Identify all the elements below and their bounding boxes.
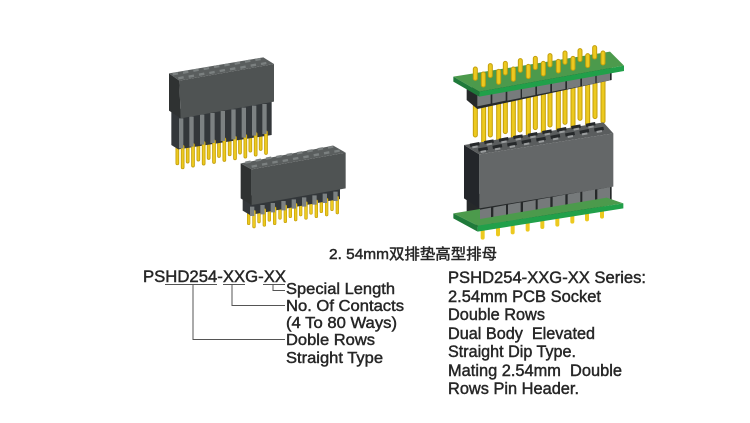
- leader lines: [165, 284, 285, 340]
- header housing: [467, 65, 612, 109]
- series description text block: Mating 2.54mm Double: [448, 362, 622, 380]
- lower green board: [453, 198, 623, 232]
- series description text block: Double Rows: [448, 306, 545, 324]
- label: number of contacts: No. Of Contacts: [286, 298, 404, 315]
- series description text block: Straight Dip Type.: [448, 343, 576, 361]
- series description text block: [448, 269, 646, 398]
- series description text block: Dual Body Elevated: [448, 325, 595, 343]
- title: 2. 54mm双排垫高型排母: [329, 246, 497, 263]
- bottom pin tips: [483, 208, 602, 238]
- icon: short double-row socket: [241, 146, 346, 227]
- socket lower body: [467, 182, 612, 228]
- series description text block: Rows Pin Header.: [448, 380, 579, 398]
- label: straight type: Straight Type: [286, 350, 383, 367]
- icon: mated socket and pin header on circuit boards: [453, 48, 624, 238]
- label: way range: (4 To 80 Ways): [286, 315, 397, 332]
- label: special length: Special Length: [286, 281, 395, 298]
- part number key diagram: [143, 267, 404, 367]
- series description text block: PSHD254-XXG-XX Series:: [448, 269, 646, 287]
- label: double rows: Doble Rows: [286, 332, 375, 349]
- long pins below upper board: [475, 74, 603, 142]
- upper pin tips: [475, 48, 603, 85]
- icon: tall double-row socket: [169, 57, 274, 167]
- upper green board: [453, 52, 624, 97]
- part number: PSHD254-XXG-XX: [143, 267, 286, 286]
- series description text block: 2.54mm PCB Socket: [448, 288, 601, 306]
- socket upper body: [464, 122, 613, 208]
